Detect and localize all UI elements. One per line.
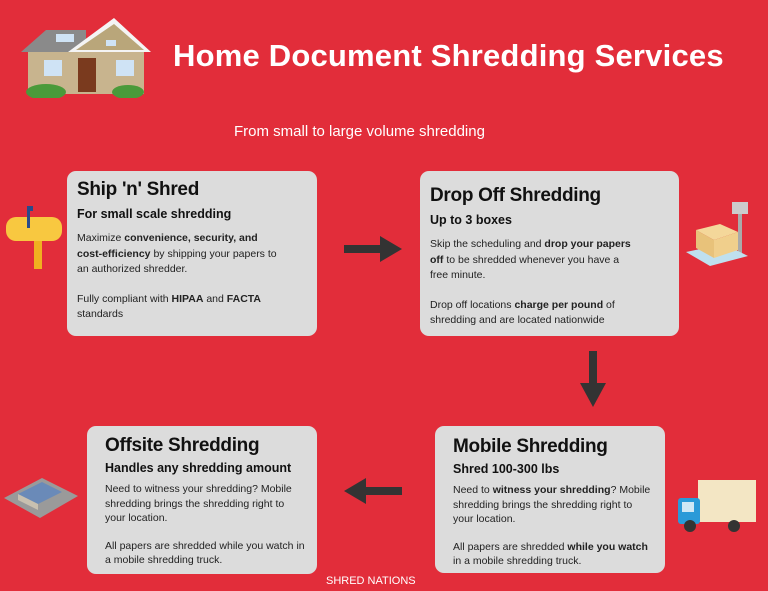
arrow: down [580, 351, 606, 407]
panel: mobile shredding: All papers are shredded while you watch [453, 540, 648, 552]
panel: offsite shredding: a mobile shredding truck. [105, 554, 222, 566]
panel: mobile shredding: in a mobile shredding truck. [453, 555, 581, 567]
panel: mobile shredding: Mobile Shredding [453, 436, 608, 457]
panel: ship n shred: For small scale shredding [77, 207, 231, 221]
panel: offsite shredding: Handles any shredding amount [105, 461, 291, 475]
panel: mobile shredding: Shred 100-300 lbs [453, 462, 559, 476]
panel: drop off shredding: shredding and are located nationwide [430, 314, 605, 326]
panel: offsite shredding: your location. [105, 512, 167, 524]
panel: mobile shredding [435, 426, 665, 573]
panel: mobile shredding: shredding brings the shredding right to [453, 498, 632, 510]
footer: SHRED NATIONS [326, 575, 416, 587]
icon: truck [678, 480, 756, 532]
panel: drop off shredding: off to be shredded whenever you have a [430, 254, 619, 266]
panel: drop off shredding: free minute. [430, 269, 485, 281]
panel: ship n shred: Ship 'n' Shred [77, 179, 199, 200]
panel: mobile shredding: Need to witness your shredding? Mobile [453, 484, 650, 496]
panel: drop off shredding: Skip the scheduling and drop your papers [430, 238, 631, 250]
panel: ship n shred: cost-efficiency by shipping your papers to [77, 248, 277, 260]
icon: scale with box [686, 202, 748, 266]
title: Home Document Shredding Services [173, 38, 724, 73]
panel: ship n shred [67, 171, 317, 336]
panel: ship n shred: standards [77, 308, 123, 320]
icon: building [4, 478, 78, 518]
panel: drop off shredding: Drop off locations charge per pound of [430, 298, 615, 310]
arrow: left [344, 478, 402, 504]
panel: drop off shredding: Drop Off Shredding [430, 185, 601, 206]
panel: offsite shredding: Need to witness your shredding? Mobile [105, 483, 292, 495]
panel: offsite shredding [87, 426, 317, 574]
panel: ship n shred: an authorized shredder. [77, 263, 187, 275]
panel: mobile shredding: your location. [453, 513, 515, 525]
panel: ship n shred: Fully compliant with HIPAA and FACTA [77, 292, 261, 304]
panel: offsite shredding: All papers are shredded while you watch in [105, 540, 305, 552]
arrow: right [344, 236, 402, 262]
icon: mailbox [6, 206, 62, 269]
panel: ship n shred: Maximize convenience, security, and [77, 232, 258, 244]
panel: offsite shredding: shredding brings the shredding right to [105, 498, 284, 510]
subtitle: From small to large volume shredding [234, 123, 485, 140]
panel: drop off shredding [420, 171, 679, 336]
icon: house [21, 18, 151, 98]
panel: offsite shredding: Offsite Shredding [105, 435, 259, 456]
panel: drop off shredding: Up to 3 boxes [430, 213, 512, 227]
